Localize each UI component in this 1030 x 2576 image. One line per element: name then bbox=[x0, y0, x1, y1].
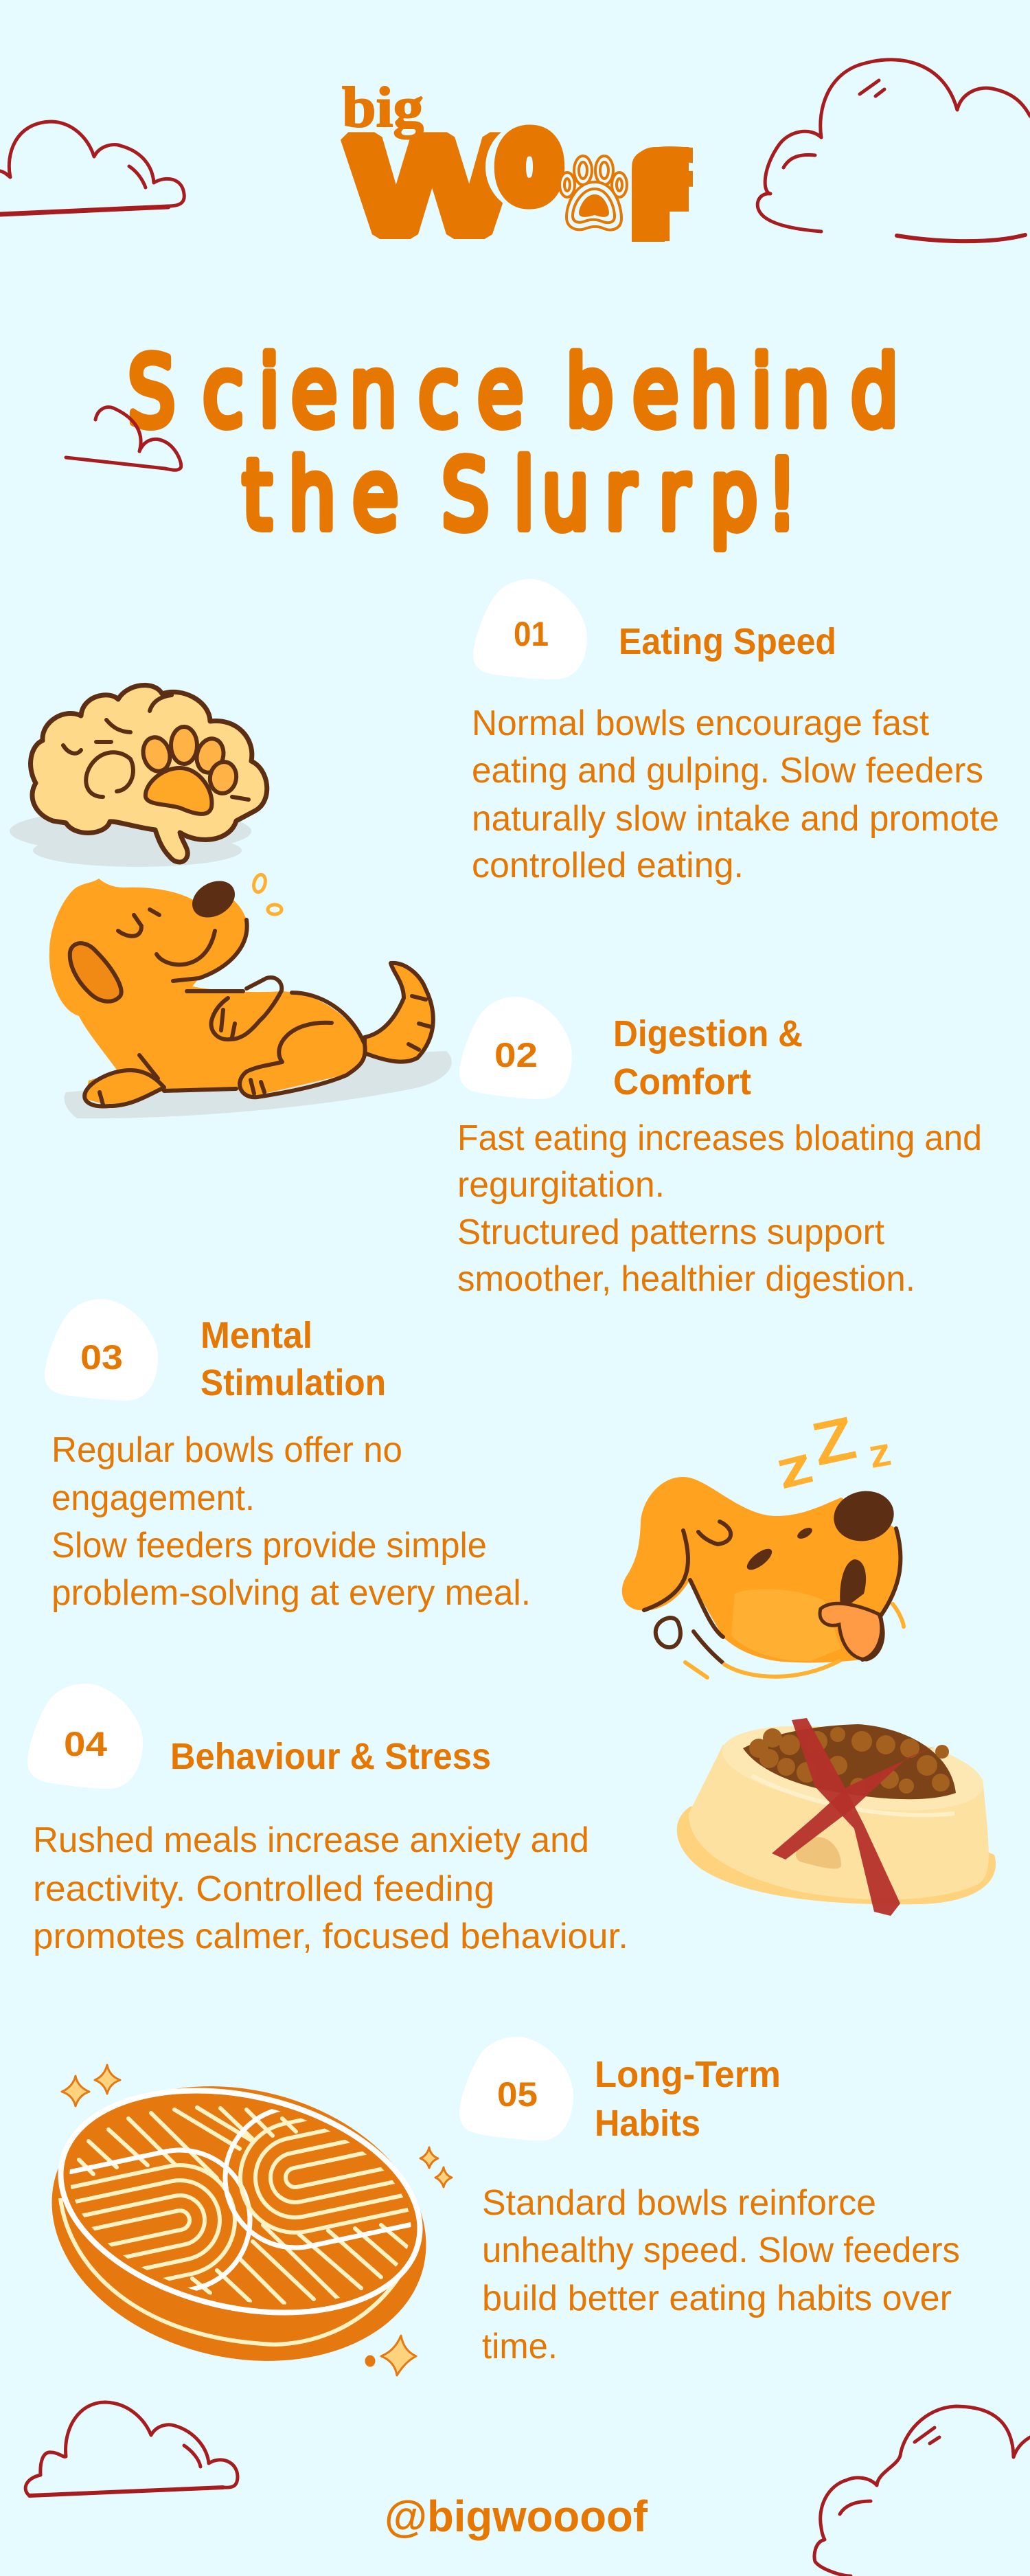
section 03: mental stimulation: Mental bbox=[201, 1315, 312, 1356]
section 05: long-term habits: Long-Term bbox=[595, 2054, 781, 2095]
section 02: digestion and comfort: Structured patterns support bbox=[457, 1212, 885, 1252]
zzz bbox=[772, 1405, 894, 1499]
illustration: slow feeder bowl bbox=[52, 2064, 453, 2377]
section 01: eating speed: controlled eating. bbox=[472, 846, 744, 885]
illustration: brain with paw bbox=[10, 686, 267, 867]
section 04: behaviour and stress: reactivity. Controlled feeding bbox=[33, 1869, 494, 1909]
section 05: long-term habits: unhealthy speed. Slow feeders bbox=[482, 2230, 960, 2270]
section 03: mental stimulation: Regular bowls offer no bbox=[52, 1430, 402, 1470]
cloud: top right bbox=[757, 60, 1030, 241]
zzz: Z bbox=[808, 1405, 860, 1477]
section 03: mental stimulation: engagement. bbox=[52, 1478, 255, 1518]
section 03: mental stimulation: Stimulation bbox=[201, 1362, 386, 1403]
icon: sparkles bbox=[62, 2065, 452, 2375]
title: the Slurrp! bbox=[242, 439, 797, 551]
icon: logo paw bbox=[560, 156, 627, 230]
logo: big woof: big bbox=[342, 76, 424, 139]
logo: big woof bbox=[342, 76, 689, 266]
section 03: mental stimulation: Slow feeders provide simple bbox=[52, 1526, 487, 1566]
illustration: sleepy dog head bbox=[622, 1405, 904, 1677]
section 01: eating speed: naturally slow intake and promote bbox=[472, 799, 999, 839]
footer handle: @bigwoooof bbox=[385, 2492, 648, 2541]
title bbox=[128, 336, 898, 551]
section 02: digestion and comfort bbox=[457, 997, 982, 1299]
section 04: behaviour and stress: Rushed meals increase anxiety and bbox=[33, 1820, 589, 1860]
zzz: z bbox=[772, 1437, 817, 1499]
section 01: eating speed: Normal bowls encourage fast bbox=[472, 703, 930, 743]
logo: big woof: W bbox=[348, 109, 516, 262]
section 04: behaviour and stress: Behaviour & Stress bbox=[170, 1736, 491, 1777]
cloud: top left bbox=[0, 122, 184, 214]
logo: big woof: f bbox=[615, 126, 689, 266]
section 01: eating speed bbox=[472, 579, 999, 885]
title: Science behind bbox=[128, 336, 898, 448]
section 04: behaviour and stress: 04 bbox=[64, 1725, 107, 1763]
section 01: eating speed: 01 bbox=[514, 615, 549, 653]
illustration: relaxed dog lying down bbox=[49, 873, 452, 1118]
section 03: mental stimulation: 03 bbox=[80, 1338, 123, 1377]
section 04: behaviour and stress: promotes calmer, focused behaviour. bbox=[33, 1917, 628, 1956]
section 05: long-term habits: Standard bowls reinforce bbox=[482, 2183, 876, 2223]
section 02: digestion and comfort: 02 bbox=[494, 1036, 538, 1074]
section 04: behaviour and stress bbox=[27, 1684, 628, 1956]
section 01: eating speed: Eating Speed bbox=[619, 621, 836, 662]
section 05: long-term habits bbox=[459, 2037, 960, 2366]
section 01: eating speed: eating and gulping. Slow feeders bbox=[472, 751, 983, 791]
cloud: bottom left bbox=[25, 2402, 238, 2496]
section 03: mental stimulation bbox=[45, 1299, 531, 1613]
section 05: long-term habits: 05 bbox=[497, 2075, 538, 2114]
logo: big woof: o bbox=[499, 93, 560, 223]
section 02: digestion and comfort: Fast eating increases bloating and bbox=[457, 1118, 982, 1158]
section 05: long-term habits: time. bbox=[482, 2327, 558, 2366]
zzz: z bbox=[867, 1432, 894, 1476]
section 02: digestion and comfort: Digestion & bbox=[613, 1013, 803, 1054]
section 02: digestion and comfort: smoother, healthier digestion. bbox=[457, 1259, 915, 1299]
cloud: beside title bbox=[66, 407, 181, 470]
section 02: digestion and comfort: regurgitation. bbox=[457, 1165, 665, 1205]
section 05: long-term habits: Habits bbox=[595, 2103, 700, 2144]
cloud: bottom right bbox=[814, 2406, 1030, 2576]
illustration: crossed-out regular bowl bbox=[677, 1712, 996, 1916]
section 03: mental stimulation: problem-solving at every meal. bbox=[52, 1573, 531, 1613]
section 02: digestion and comfort: Comfort bbox=[613, 1061, 751, 1103]
section 05: long-term habits: build better eating habits over bbox=[482, 2279, 952, 2318]
